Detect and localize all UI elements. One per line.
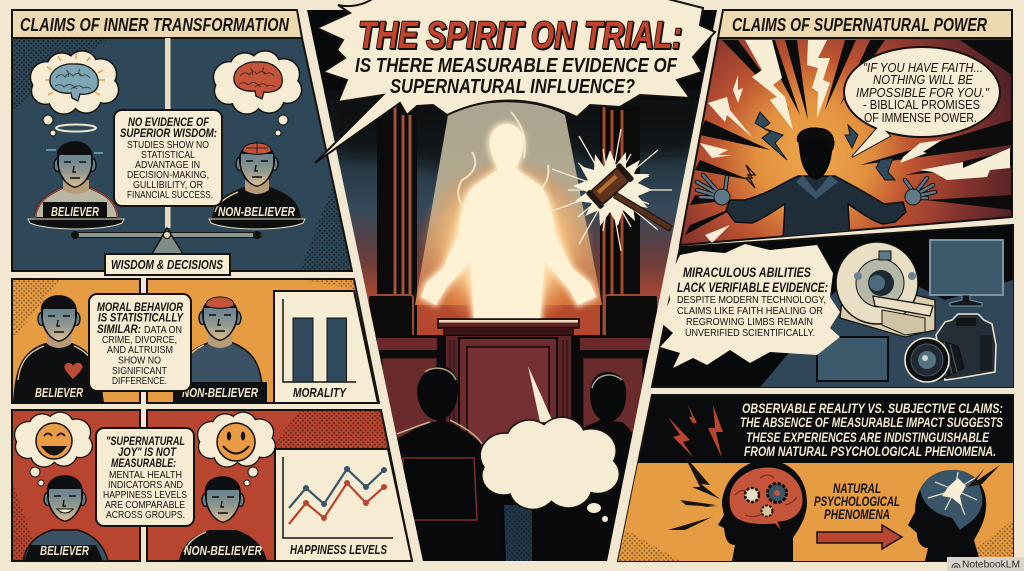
callout: moral behavior is statistically similar: MORAL BEHAVIOR	[97, 300, 183, 314]
subtitle line one: IS THERE MEASURABLE EVIDENCE OF	[355, 55, 678, 77]
balance scale	[28, 219, 305, 254]
panel header: inner transformation: CLAIMS OF INNER TRANSFORMATION	[20, 15, 290, 35]
spotlight beam	[415, 102, 602, 305]
line chart: happiness levels: HAPPINESS LEVELS	[290, 542, 387, 557]
thought bubble: laughing face	[15, 413, 92, 486]
callout: miraculous abilities lack verifiable evidence: DESPITE MODERN TECHNOLOGY,	[677, 294, 826, 306]
sub-panel: wisdom and decisions	[12, 38, 352, 275]
speech bubble: biblical promises: IMPOSSIBLE FOR YOU."	[856, 85, 990, 100]
callout: moral behavior is statistically similar: SHOW NO	[118, 354, 161, 366]
label: natural psychological phenomena: PSYCHOLOGICAL	[814, 493, 900, 509]
figure: smiling believer	[23, 475, 108, 561]
figure: non-believer: NON-BELIEVER	[184, 543, 262, 558]
thought bubble: smiling face	[198, 413, 275, 486]
callout: miraculous abilities lack verifiable evidence: MIRACULOUS ABILITIES	[683, 264, 812, 280]
figure: non-believer with exposed brain	[173, 297, 267, 403]
camera	[905, 314, 996, 382]
panel header: supernatural power	[718, 10, 1012, 38]
speech bubble: biblical promises: NOTHING WILL BE	[873, 72, 973, 87]
callout: supernatural joy is not measurable: ARE COMPARABLE	[105, 499, 185, 511]
panel: claims of inner transformation	[12, 10, 352, 275]
speech bubble: biblical promises: "IF YOU HAVE FAITH...	[863, 60, 983, 75]
sub-panel: miraculous abilities	[652, 225, 1013, 387]
figure: non-believer with exposed brain: NON-BELIEVER	[182, 385, 258, 400]
callout: no evidence of superior wisdom: NO EVIDENCE OF	[128, 115, 210, 129]
callout: moral behavior is statistically similar: AND ALTRUISM	[107, 344, 173, 356]
callout: no evidence of superior wisdom: ADVANTAGE IN	[135, 159, 200, 171]
thought bubble: blue brain	[31, 52, 118, 136]
callout: moral behavior is statistically similar: SIMILAR:	[97, 322, 141, 336]
callout: no evidence of superior wisdom: FINANCIAL SUCCESS.	[127, 189, 213, 201]
head with cracked brain	[908, 465, 1000, 561]
callout: no evidence of superior wisdom: GULLIBILITY, OR	[133, 179, 203, 191]
arrow	[817, 525, 902, 549]
bar chart: morality	[274, 291, 378, 403]
badge: NotebookLM watermark	[947, 557, 1024, 571]
callout: supernatural joy is not measurable: ACROSS GROUPS.	[106, 509, 185, 521]
line chart: happiness levels	[275, 449, 412, 561]
judge bench and chairs	[367, 294, 659, 460]
label: natural psychological phenomena	[814, 480, 900, 522]
bar chart: morality: MORALITY	[293, 385, 347, 400]
callout: miraculous abilities lack verifiable evidence: REGROWING LIMBS REMAIN	[686, 316, 813, 328]
monitor	[930, 240, 1003, 306]
label: natural psychological phenomena: NATURAL	[833, 480, 881, 496]
figure: smiling believer: BELIEVER	[40, 543, 89, 558]
red lightning accents	[668, 405, 723, 458]
callout: no evidence of superior wisdom	[114, 110, 222, 206]
label: natural psychological phenomena: PHENOMENA	[824, 506, 890, 522]
glowing spirit figure	[419, 112, 596, 330]
callout: supernatural joy is not measurable	[96, 428, 194, 526]
empty thought bubble	[481, 366, 619, 522]
title heading: THE SPIRIT ON TRIAL:	[358, 15, 682, 57]
lightning bolts	[700, 40, 1010, 243]
panel header: inner transformation	[12, 10, 302, 38]
figure: non-believer	[179, 476, 267, 561]
subtitle line two: SUPERNATURAL INFLUENCE?	[390, 76, 635, 98]
figure: believer with halo on scale: BELIEVER	[51, 204, 99, 219]
callout: moral behavior is statistically similar: SIGNIFICANT	[112, 365, 167, 377]
label: wisdom and decisions: WISDOM & DECISIONS	[111, 257, 223, 272]
callout: miraculous abilities lack verifiable evidence: UNVERIFIED SCIENTIFICALLY.	[685, 327, 815, 339]
callout: moral behavior is statistically similar: DIFFERENCE.	[112, 375, 167, 387]
sub-panel: burst of power	[680, 38, 1012, 245]
callout: supernatural joy is not measurable: HAPPINESS LEVELS	[103, 489, 187, 501]
speech bubble: biblical promises: OF IMMENSE POWER.	[864, 111, 977, 125]
figure: believer with heart: BELIEVER	[35, 385, 83, 400]
panel: courtroom scene	[300, 0, 730, 570]
callout: miraculous abilities lack verifiable evidence	[660, 244, 840, 368]
black speed rays	[685, 40, 1012, 235]
speech bubble: biblical promises: - BIBLICAL PROMISES	[863, 98, 980, 112]
figure: non-believer with exposed brain on scale: NON-BELIEVER	[218, 204, 295, 219]
spectators seen from behind	[395, 366, 640, 570]
callout: supernatural joy is not measurable: MEASURABLE:	[111, 456, 176, 470]
panel: morality	[12, 279, 379, 403]
callout: no evidence of superior wisdom: DECISION-MAKING,	[127, 169, 209, 181]
callout: miraculous abilities lack verifiable evidence: CLAIMS LIKE FAITH HEALING OR	[677, 305, 823, 317]
callout: supernatural joy is not measurable: "SUPERNATURAL	[106, 434, 185, 448]
callout: moral behavior is statistically similar: DATA ON	[144, 324, 182, 336]
callout: no evidence of superior wisdom: SUPERIOR WISDOM:	[120, 126, 217, 140]
figure: believer with heart	[13, 295, 104, 403]
callout: no evidence of superior wisdom: STATISTICAL	[141, 149, 195, 161]
callout: moral behavior is statistically similar: IS STATISTICALLY	[98, 310, 184, 324]
thought bubble: red brain	[214, 52, 301, 136]
callout: miraculous abilities lack verifiable evidence: LACK VERIFIABLE EVIDENCE:	[677, 279, 828, 295]
sub-panel: observable reality	[618, 395, 1013, 561]
speech bubble: biblical promises	[844, 47, 1000, 157]
empty display panel	[817, 337, 888, 381]
courtroom pillars	[377, 105, 640, 340]
callout: moral behavior is statistically similar	[89, 294, 191, 391]
mri scanner	[836, 242, 935, 337]
closing statement text	[740, 400, 1003, 459]
title speech burst	[315, 0, 715, 163]
callout: supernatural joy is not measurable: INDICATORS AND	[108, 479, 183, 491]
man with raised arms	[697, 127, 935, 240]
gavel striking with starburst	[552, 129, 672, 251]
head with gears brain	[668, 455, 807, 561]
badge: NotebookLM watermark: NotebookLM	[962, 558, 1020, 570]
callout: moral behavior is statistically similar: CRIME, DIVORCE,	[102, 334, 177, 346]
label: wisdom and decisions	[105, 254, 230, 275]
panel: claims of supernatural power	[618, 10, 1013, 561]
panel: happiness	[12, 410, 412, 561]
callout: supernatural joy is not measurable: JOY" IS NOT	[118, 445, 177, 459]
callout: no evidence of superior wisdom: STUDIES SHOW NO	[127, 139, 209, 151]
callout: supernatural joy is not measurable: MENTAL HEALTH	[109, 469, 182, 481]
figure: non-believer with exposed brain on scale	[213, 141, 300, 219]
figure: believer with halo on scale	[35, 124, 118, 219]
